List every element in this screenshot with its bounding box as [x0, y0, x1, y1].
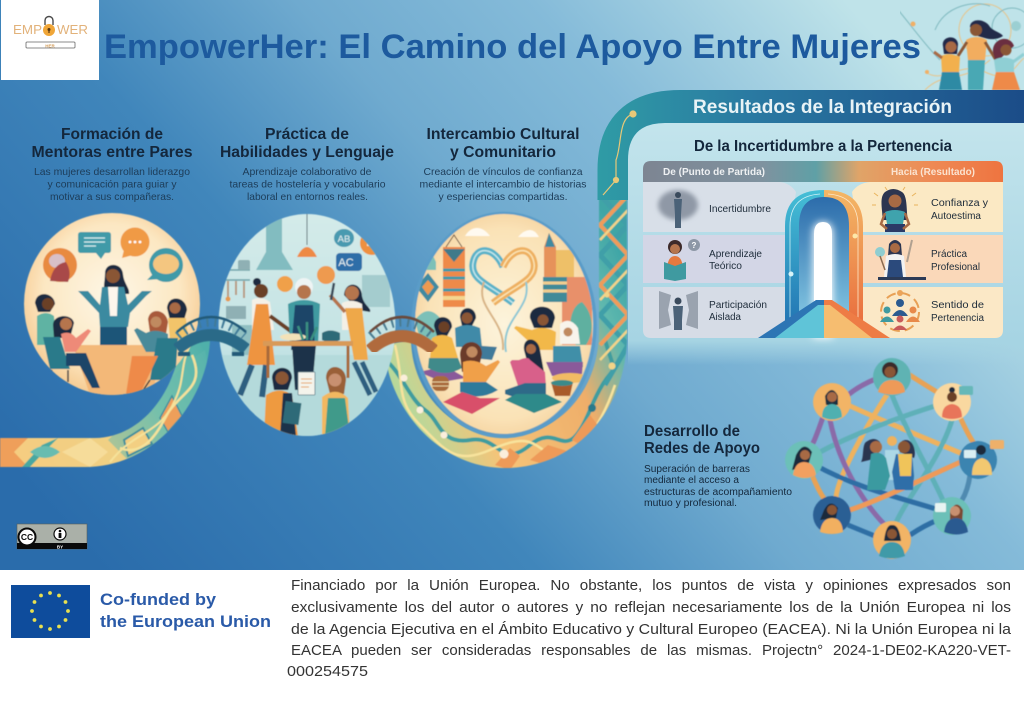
- heading: Formación de Mentoras entre Pares: [32, 126, 192, 161]
- text: Práctica description: laboral en entornos reales.: [247, 191, 368, 203]
- table header: Hacia (Resultado): [891, 167, 975, 178]
- seated women right: [126, 298, 188, 394]
- learner: right: [298, 367, 350, 436]
- row: Sentido de Pertenencia: Pertenencia: [931, 313, 984, 324]
- logo: EmpowerHer: EMP: [13, 23, 42, 37]
- row: Práctica Profesional: [862, 235, 1003, 283]
- seated women: [419, 307, 588, 399]
- heading: Intercambio Cultural y Comunitario: Intercambio Cultural: [426, 126, 580, 143]
- text: funding disclaimer: exclusivamente los del autor o autores y no reflejan necesariamente los de la Unión Europea ni los: [291, 600, 1011, 616]
- cushions and baskets: [432, 376, 573, 414]
- row: Incertidumbre: Incertidumbre: [709, 204, 771, 215]
- text: network description: Superación de barreras: [644, 464, 750, 475]
- cook: center: [288, 278, 320, 390]
- icon: Creative Commons BY badge: BY: [57, 544, 63, 550]
- row: Incertidumbre: [643, 182, 796, 232]
- table: [73, 345, 155, 395]
- ribbon: path around third circle and into results: [384, 190, 628, 470]
- row: Aprendizaje Teórico: ?: [692, 241, 697, 250]
- icon: glowing portal: [758, 190, 890, 338]
- cook: left: [240, 278, 292, 397]
- heading: Formación de Mentoras entre Pares: Formación de: [61, 126, 163, 143]
- text: network description: [644, 464, 792, 509]
- circle: cultural exchange scene: [413, 214, 595, 436]
- heading: Intercambio Cultural y Comunitario: y Comunitario: [450, 144, 556, 161]
- heading: Práctica de Habilidades y Lenguaje: Habilidades y Lenguaje: [220, 144, 394, 161]
- network diagram: [785, 358, 1004, 559]
- node: right: [959, 440, 1004, 479]
- clouds: [465, 228, 539, 237]
- text: Formación description: y comunicación para guiar y: [48, 178, 177, 190]
- connecting ribbons: [812, 372, 975, 536]
- text: funding disclaimer: Financiado por la Unión Europea. No obstante, los puntos de vista y opiniones expresados son: [291, 578, 1011, 594]
- table with pot: [263, 322, 353, 378]
- bridge: second: [370, 317, 434, 350]
- buildings: [543, 233, 592, 345]
- text: Intercambio description: mediante el intercambio de historias: [420, 178, 586, 190]
- heading: Práctica de Habilidades y Lenguaje: Práctica de: [265, 126, 349, 143]
- heading: Práctica de Habilidades y Lenguaje: [220, 126, 394, 161]
- text: Co-funded by the European Union: Co-funded by: [100, 590, 217, 609]
- title: EmpowerHer: El Camino del Apoyo Entre Mujeres: [104, 28, 921, 66]
- text: funding disclaimer: EACEA pueden ser consideradas responsables de las mismas. Projectn° 2024-1-DE02-KA220-VET-: [291, 643, 1011, 659]
- text: Formación description: [34, 166, 190, 203]
- row: Confianza y Autoestima: [852, 182, 1003, 232]
- row: Práctica Profesional: Profesional: [931, 262, 980, 273]
- central mentor: [78, 265, 152, 345]
- text: funding disclaimer: [287, 578, 1012, 680]
- text: funding disclaimer: 000254575: [287, 664, 368, 680]
- row: Aprendizaje Teórico: Aprendizaje: [709, 249, 762, 260]
- row: Participación Aislada: Aislada: [709, 312, 741, 323]
- circle: mentoring scene: [24, 213, 200, 395]
- row: Sentido de Pertenencia: Sentido de: [931, 300, 984, 311]
- text: Práctica description: [230, 166, 386, 203]
- text: Práctica description: tareas de hostelería y vocabulario: [230, 178, 386, 190]
- background panel: [0, 0, 1024, 570]
- logo: EmpowerHer: HER: [45, 43, 55, 48]
- text: Intercambio description: y esperiencias compartidas.: [438, 191, 568, 203]
- seated women left: [35, 294, 100, 388]
- table: from / to: [643, 161, 1003, 338]
- text: network description: mediante el acceso a: [644, 475, 739, 486]
- tapestry and rug: [415, 235, 465, 340]
- row: Participación Aislada: [643, 287, 785, 338]
- node: top: [873, 358, 911, 396]
- text: Práctica description: Aprendizaje colaborativo de: [242, 166, 372, 178]
- text: Intercambio description: [420, 166, 586, 203]
- bridge: first: [177, 317, 246, 356]
- text: Co-funded by the European Union: [100, 590, 271, 631]
- subheading: De la Incertidumbre a la Pertenencia: De la Incertidumbre a la Pertenencia: [694, 138, 952, 155]
- row: Aprendizaje Teórico: [643, 235, 789, 283]
- circle: kitchen scene: [217, 212, 397, 440]
- logo: EmpowerHer: WER: [57, 23, 88, 37]
- logo: EmpowerHer: [1, 0, 99, 80]
- heading: Formación de Mentoras entre Pares: Mentoras entre Pares: [32, 144, 192, 161]
- vocabulary bubbles: AB: [338, 234, 350, 245]
- decorative circuit line: [603, 111, 636, 195]
- node: lower left: [813, 496, 851, 534]
- network heading: Desarrollo de Redes de Apoyo: [644, 423, 760, 457]
- node: upper right: [933, 383, 973, 421]
- text: Formación description: Las mujeres desarrollan liderazgo: [34, 166, 190, 178]
- table header: [643, 161, 1003, 182]
- heading: Resultados de la Integración: Resultados de la Integración: [693, 96, 952, 118]
- node: left: [785, 441, 823, 479]
- icon: EU flag: [11, 585, 90, 638]
- heading: Intercambio Cultural y Comunitario: [426, 126, 580, 161]
- node: lower right: [933, 497, 971, 535]
- kitchen background: [217, 212, 397, 440]
- cook: right: [330, 283, 376, 395]
- text: network description: mutuo y profesional.: [644, 498, 737, 509]
- row: Confianza y Autoestima: Autoestima: [931, 211, 981, 222]
- text: Intercambio description: Creación de vínculos de confianza: [424, 166, 583, 178]
- center: two women supporting each other: [861, 436, 915, 490]
- network heading: Desarrollo de Redes de Apoyo: Desarrollo de: [644, 423, 740, 440]
- results band and arc: [614, 106, 1024, 200]
- vocabulary bubbles: AC: [338, 257, 354, 269]
- row: Práctica Profesional: Práctica: [931, 249, 967, 260]
- vocabulary bubbles: [277, 229, 384, 292]
- row: Aprendizaje Teórico: Teórico: [709, 261, 742, 272]
- text: Co-funded by the European Union: the European Union: [100, 612, 271, 631]
- row: Confianza y Autoestima: Confianza y: [931, 198, 988, 209]
- panel: results background: [628, 123, 1024, 365]
- text: network description: estructuras de acompañamiento: [644, 487, 792, 498]
- footer background: [0, 570, 1024, 724]
- icon: Creative Commons BY badge: CC: [21, 532, 33, 542]
- icon: Creative Commons BY badge: [17, 524, 87, 550]
- node: upper left: [813, 383, 851, 421]
- network heading: Desarrollo de Redes de Apoyo: Redes de Apoyo: [644, 440, 760, 457]
- text: Formación description: motivar a sus compañeras.: [50, 191, 174, 203]
- learner: left: [264, 368, 301, 436]
- speech bubbles: [43, 228, 183, 282]
- woven heart: [473, 251, 534, 352]
- illustration: three women walking: [900, 2, 1024, 90]
- text: funding disclaimer: de la Agencia Ejecutiva en el Ámbito Educativo y Cultural Europeo (EACEA). Ni la Unión Europea ni la: [291, 621, 1012, 638]
- ribbon: left path: [0, 340, 210, 467]
- table header: De (Punto de Partida): [663, 167, 765, 178]
- row: Participación Aislada: Participación: [709, 300, 767, 311]
- row: Sentido de Pertenencia: [860, 287, 1003, 338]
- node: bottom: [873, 521, 911, 559]
